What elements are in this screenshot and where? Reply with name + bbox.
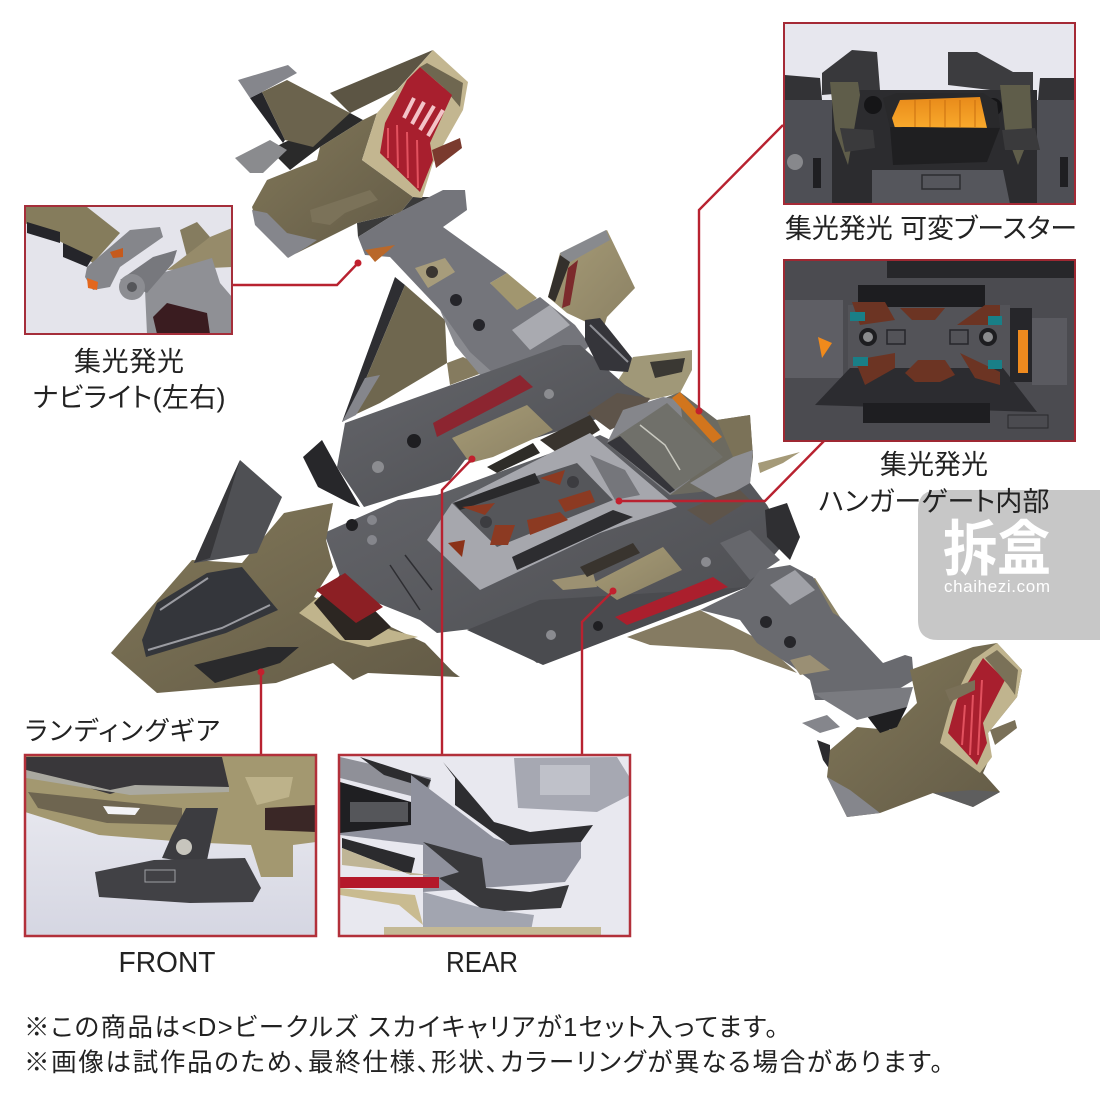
footnotes [24, 1014, 943, 1077]
nose section [111, 460, 458, 693]
panel: front landing gear [25, 755, 316, 936]
caption: variable booster: 集光発光 可変ブースター [785, 214, 1077, 244]
caption: hangar gate interior: ハンガーゲート内部 [818, 487, 1050, 517]
main lower body [324, 435, 800, 665]
centre bay [427, 433, 677, 590]
watermark [918, 490, 1100, 640]
top wing pod [235, 50, 468, 258]
caption: hangar gate interior [818, 450, 1050, 517]
caption: REAR: REAR [446, 947, 518, 979]
caption: navigation light [32, 347, 226, 413]
footnotes: ※この商品は<D>ビークルズ スカイキャリアが1セット入ってます。 [24, 1014, 778, 1042]
panel: variable booster [784, 23, 1075, 204]
right fin [548, 230, 692, 400]
panel: navigation light [25, 206, 232, 334]
panel: rear landing gear [339, 755, 630, 936]
watermark: 拆盒 [943, 516, 1051, 583]
upper arm [358, 190, 630, 420]
heading: landing gear: ランディングギア [25, 716, 220, 746]
rear box with orange light [607, 392, 800, 525]
caption: navigation light: 集光発光 [74, 347, 184, 377]
vehicle photo: Sky Carrier [111, 50, 1022, 817]
leader lines [232, 125, 825, 755]
caption: hangar gate interior: 集光発光 [880, 450, 988, 480]
triangular wing below the arm [342, 277, 490, 422]
lower left fin [400, 633, 460, 677]
watermark: chaihezi.com [944, 577, 1050, 596]
upper plate [303, 318, 650, 507]
footnotes: ※画像は試作品のため、最終仕様、形状、カラーリングが異なる場合があります。 [24, 1049, 943, 1077]
lower wing underside [627, 610, 797, 673]
caption: FRONT: FRONT [118, 947, 216, 979]
bottom wing pod [802, 643, 1022, 817]
panel: hangar gate interior [784, 260, 1075, 441]
lower right arm [700, 565, 914, 700]
caption: navigation light: ナビライト(左右) [32, 383, 226, 413]
